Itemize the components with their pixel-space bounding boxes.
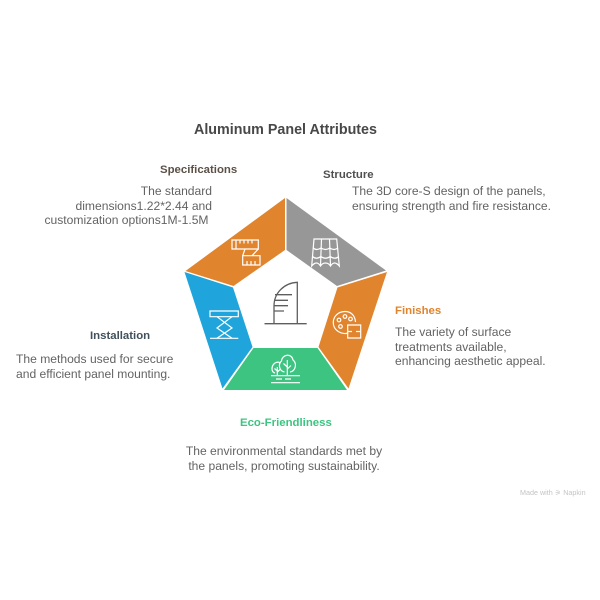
heading: eco-friendliness: Eco-Friendliness bbox=[240, 417, 332, 429]
text: installation: and efficient panel mounting. bbox=[16, 367, 170, 381]
text: installation: The methods used for secure bbox=[16, 352, 173, 366]
icon: roof tiles bbox=[312, 239, 339, 266]
text: specifications: dimensions1.22*2.44 and bbox=[76, 199, 212, 213]
footer: made with napkin: Made with ⚞ Napkin bbox=[520, 488, 586, 497]
heading: installation: Installation bbox=[90, 330, 150, 342]
icon: measuring tape bbox=[232, 240, 260, 265]
icon: building bbox=[264, 282, 307, 324]
text: structure bbox=[352, 184, 551, 213]
text: finishes: treatments available, bbox=[395, 340, 507, 354]
icon: scissor lift bbox=[210, 311, 238, 338]
segment: finishes bbox=[318, 272, 387, 388]
text: specifications: The standard bbox=[141, 184, 212, 198]
text: structure: The 3D core-S design of the panels, bbox=[352, 184, 546, 198]
text: finishes bbox=[395, 325, 546, 368]
heading: finishes: Finishes bbox=[395, 305, 441, 317]
text: structure: ensuring strength and fire resistance. bbox=[352, 199, 551, 213]
heading: specifications: Specifications bbox=[160, 164, 237, 176]
text: eco-friendliness: the panels, promoting sustainability. bbox=[188, 459, 380, 473]
icon: palette and swatch bbox=[333, 312, 361, 338]
text: installation bbox=[16, 352, 173, 381]
icon: trees bbox=[271, 355, 300, 383]
text: eco-friendliness bbox=[186, 444, 382, 473]
segment: eco-friendliness bbox=[224, 348, 347, 390]
title: Aluminum Panel Attributes bbox=[194, 122, 377, 138]
text: finishes: The variety of surface bbox=[395, 325, 511, 339]
heading: structure: Structure bbox=[323, 169, 374, 181]
segment: installation bbox=[184, 272, 252, 388]
segment: structure bbox=[286, 198, 386, 286]
text: specifications: customization options1M-1.5M bbox=[44, 213, 208, 227]
text: eco-friendliness: The environmental standards met by bbox=[186, 444, 382, 458]
segment: specifications bbox=[186, 198, 285, 286]
text: finishes: enhancing aesthetic appeal. bbox=[395, 354, 546, 368]
text: specifications bbox=[44, 184, 212, 227]
